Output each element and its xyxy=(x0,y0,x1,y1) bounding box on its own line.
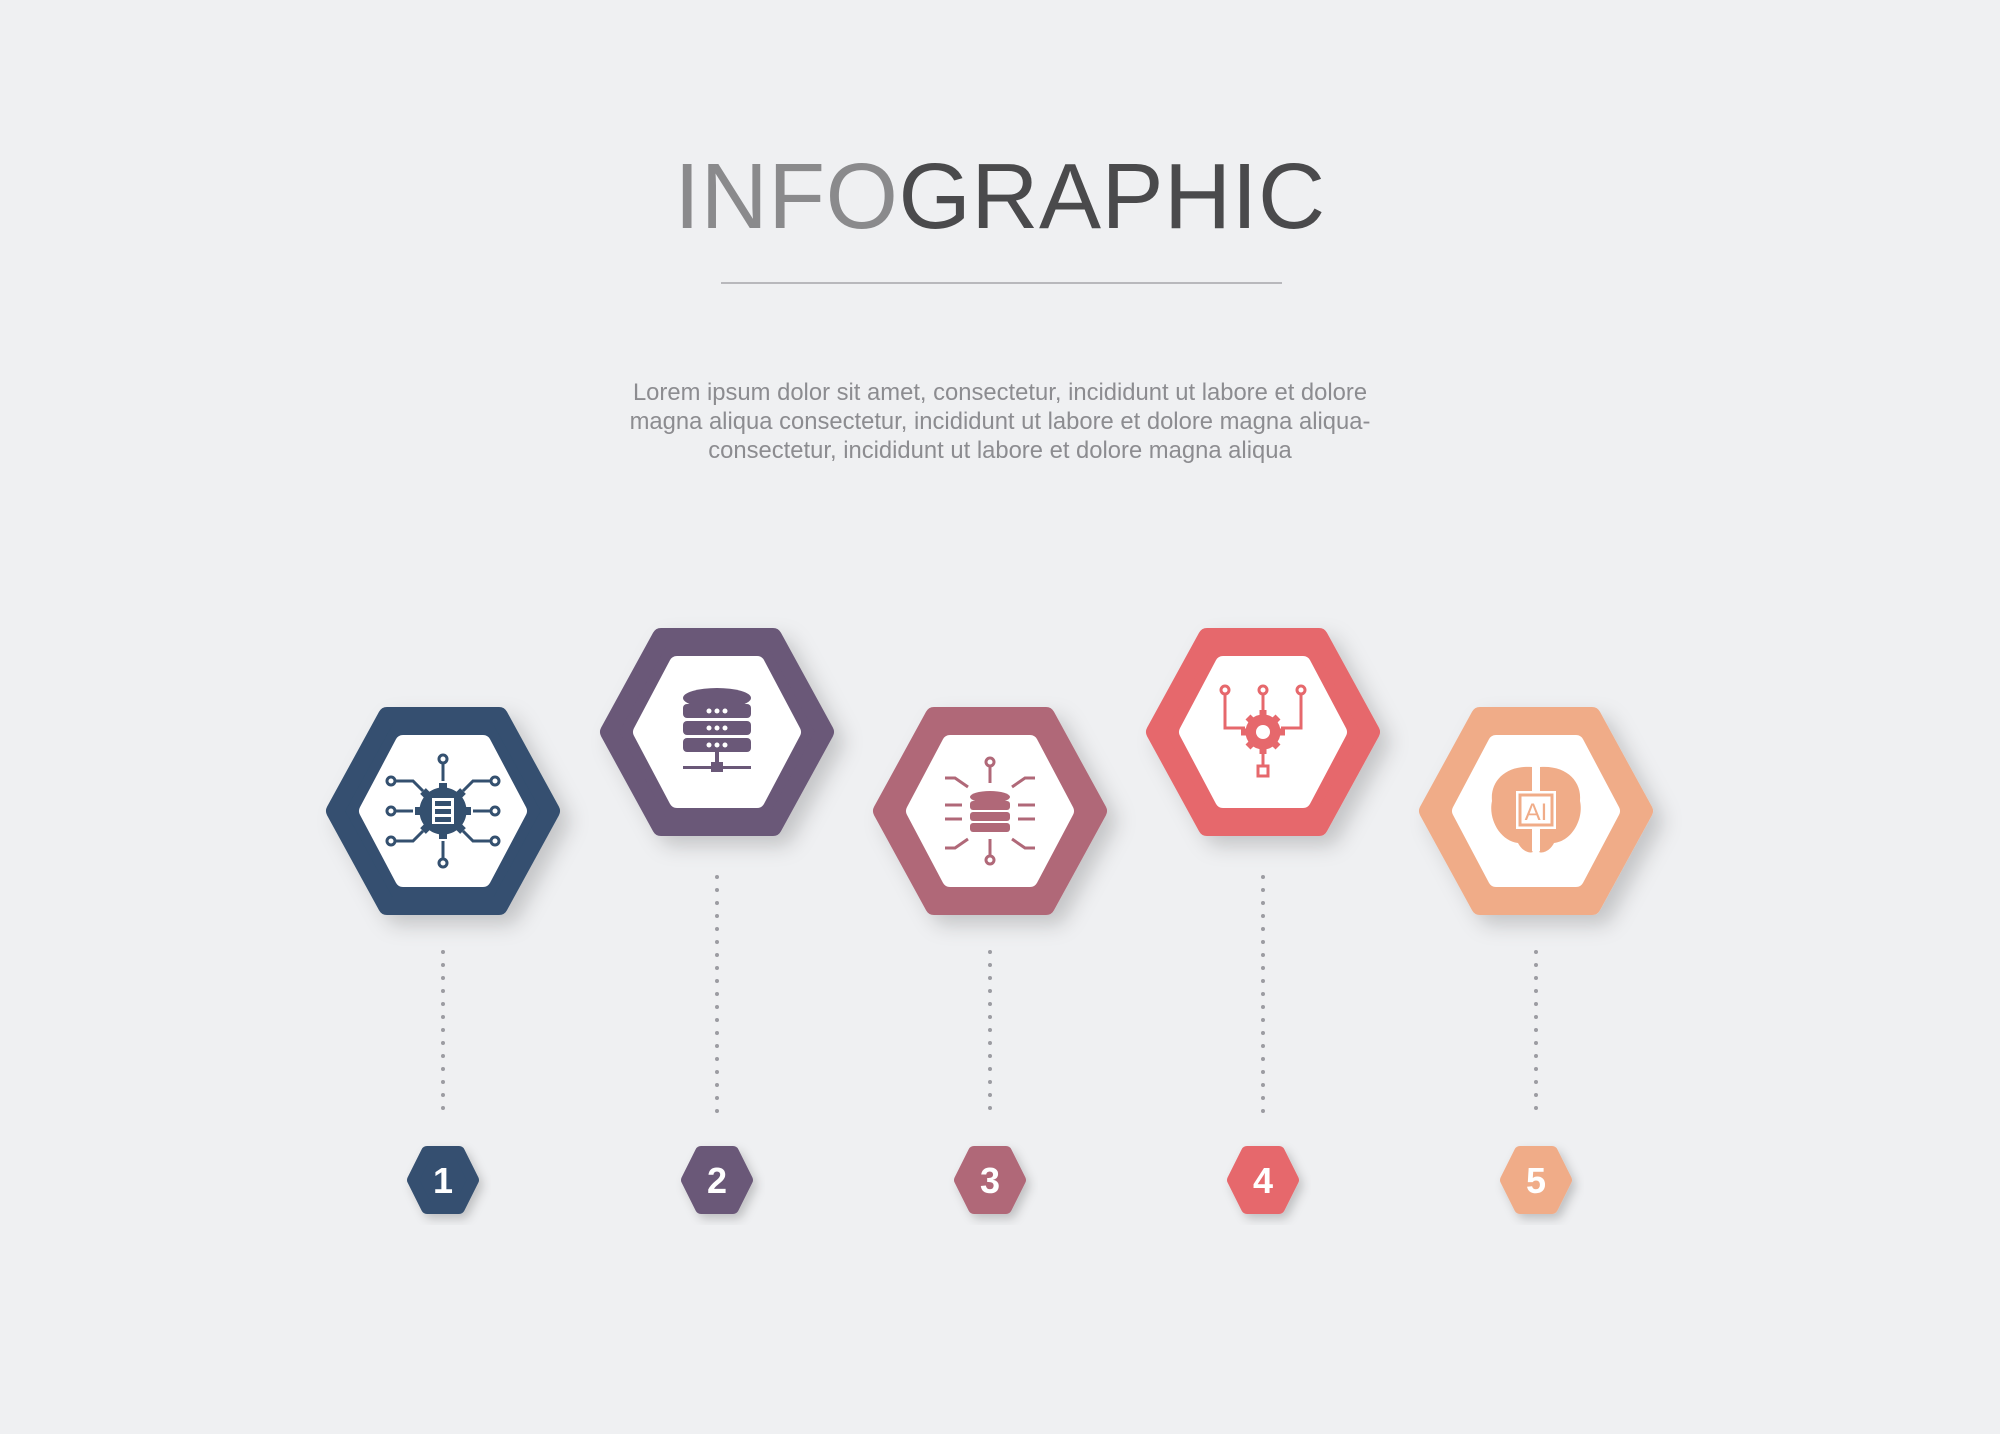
icon: database server xyxy=(683,688,751,772)
step 5 hexagon xyxy=(1428,716,1644,906)
icon: AI brain chip: AI xyxy=(1525,799,1547,826)
icon: AI brain chip xyxy=(1491,767,1581,853)
badge 5: 5 xyxy=(1526,1160,1546,1201)
step 3 hexagon xyxy=(882,716,1098,906)
description text: consectetur, incididunt ut labore et dolore magna aliqua xyxy=(708,437,1292,464)
badge 4: 4 xyxy=(1253,1160,1273,1201)
description text: magna aliqua consectetur, incididunt ut labore et dolore magna aliqua- xyxy=(630,408,1370,435)
badge 1 xyxy=(413,1152,473,1208)
badge 1: 1 xyxy=(433,1160,453,1201)
badge 5 xyxy=(1506,1152,1566,1208)
badge 2 xyxy=(687,1152,747,1208)
number badges xyxy=(413,1152,1566,1208)
icon: gear network xyxy=(387,755,499,867)
badge 3: 3 xyxy=(980,1160,1000,1201)
dotted connectors xyxy=(443,877,1536,1116)
title: INFOGRAPHIC xyxy=(674,144,1326,248)
icon: database distribution xyxy=(945,758,1035,864)
step 1 hexagon xyxy=(335,716,551,906)
icon: gear with circuit xyxy=(1221,686,1305,776)
description text: Lorem ipsum dolor sit amet, consectetur, incididunt ut labore et dolore xyxy=(633,379,1367,406)
step 4 hexagon xyxy=(1155,637,1371,827)
badge 2: 2 xyxy=(707,1160,727,1201)
badge 4 xyxy=(1233,1152,1293,1208)
step 2 hexagon xyxy=(609,637,825,827)
badge 3 xyxy=(960,1152,1020,1208)
